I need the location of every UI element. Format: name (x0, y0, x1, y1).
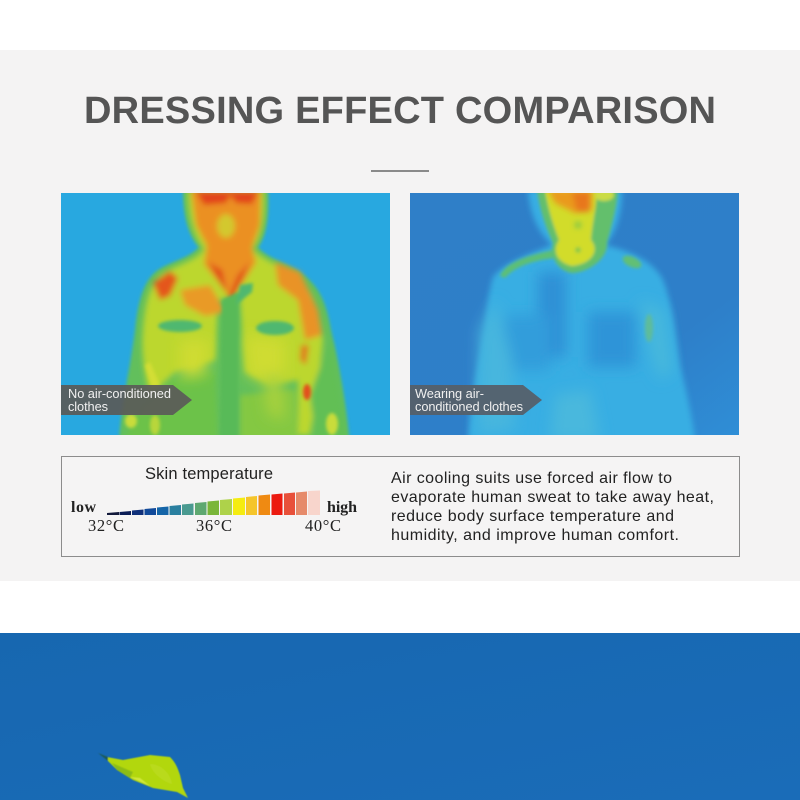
legend box (62, 456, 740, 556)
panel: blue banner (0, 633, 800, 800)
description text: humidity, and improve human comfort. (391, 527, 679, 544)
description text: evaporate human sweat to take away heat, (391, 489, 714, 506)
title: DRESSING EFFECT COMPARISON (84, 90, 716, 132)
label: wearing air-conditioned clothes (410, 385, 542, 415)
scale label: 40°C: 40°C (305, 516, 341, 535)
label: no air-conditioned clothes: No air-conditioned (68, 386, 171, 401)
label: wearing air-conditioned clothes: Wearing air- (415, 386, 484, 401)
legend title: skin temperature: Skin temperature (145, 465, 273, 483)
label: no air-conditioned clothes: clothes (68, 399, 108, 414)
icon: green leaf (98, 753, 188, 798)
description text: reduce body surface temperature and (391, 508, 674, 525)
description text (391, 470, 714, 544)
label: no air-conditioned clothes (61, 385, 192, 415)
scale label: 36°C: 36°C (196, 516, 232, 535)
scale label: low: low (71, 499, 96, 516)
divider under title (371, 170, 429, 172)
panel: thermal image wearing air-conditioned clothes (410, 189, 739, 440)
description text: Air cooling suits use forced air flow to (391, 470, 672, 487)
temperature colour scale (107, 490, 320, 515)
label: wearing air-conditioned clothes: conditioned clothes (415, 399, 523, 414)
panel: comparison background (0, 50, 800, 581)
scale label: high: high (327, 499, 357, 516)
panel: thermal image without air-conditioned clothes (61, 190, 390, 440)
scale label: 32°C: 32°C (88, 516, 124, 535)
